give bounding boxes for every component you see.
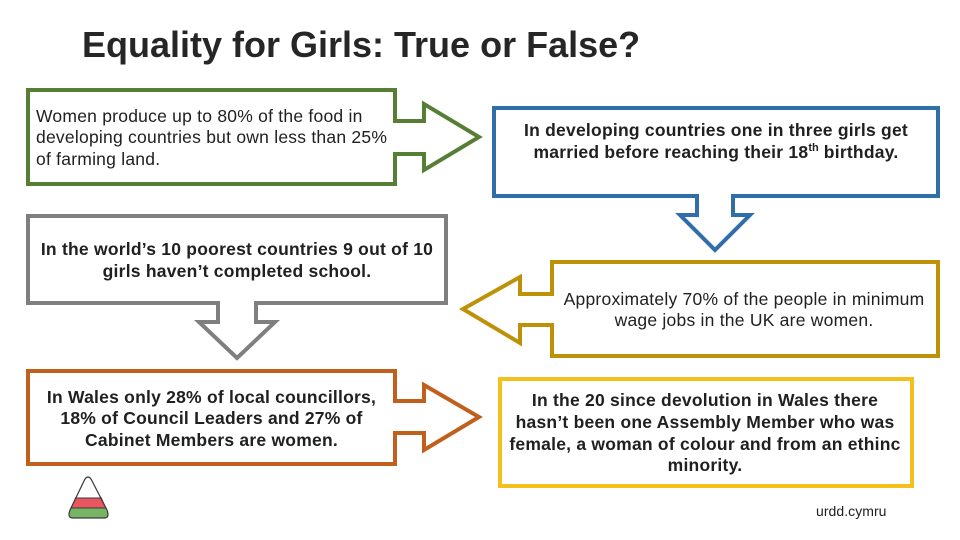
text: devolution: minority.	[668, 455, 742, 475]
text: school completion	[41, 239, 433, 281]
text: website: urdd.cymru	[816, 503, 887, 519]
text: food and land: of farming land.	[36, 149, 160, 169]
text: school completion: In the world’s 10 poorest countries 9 out of 10	[41, 239, 433, 259]
text: minimum wage: Approximately 70% of the people in minimum	[564, 289, 924, 309]
panel: green arrow box	[28, 90, 479, 184]
text: devolution	[509, 390, 901, 475]
text: food and land: Women produce up to 80% of the food in	[36, 106, 363, 126]
text: Wales councillors: In Wales only 28% of local councillors,	[47, 387, 376, 407]
text: food and land	[36, 106, 387, 169]
text: child marriage: In developing countries one in three girls get	[524, 120, 908, 140]
text: child marriage: married before reaching their 18th birthday.	[534, 142, 898, 162]
text: minimum wage	[564, 289, 924, 330]
text: food and land: developing countries but own less than 25%	[36, 127, 387, 147]
text: school completion: girls haven’t completed school.	[103, 261, 371, 281]
title: Equality for Girls: True or False?	[82, 24, 640, 64]
panel: gold arrow box	[463, 262, 938, 356]
text: Wales councillors: Cabinet Members are women.	[85, 430, 338, 450]
text: child marriage	[524, 120, 908, 162]
panel: yellow box	[500, 379, 912, 486]
panel: grey arrow box	[28, 216, 446, 358]
text: devolution: hasn’t been one Assembly Member who was	[516, 412, 894, 432]
icon: Urdd triangle logo	[69, 477, 108, 518]
text: Wales councillors	[47, 387, 376, 450]
panel: orange arrow box	[28, 371, 479, 464]
text: devolution: female, a woman of colour and from an ethinc	[509, 434, 901, 454]
text: Wales councillors: 18% of Council Leaders and 27% of	[60, 408, 363, 428]
panel: blue arrow box	[494, 108, 938, 250]
text: minimum wage: wage jobs in the UK are women.	[615, 310, 873, 330]
text: devolution: In the 20 since devolution in Wales there	[532, 390, 878, 410]
